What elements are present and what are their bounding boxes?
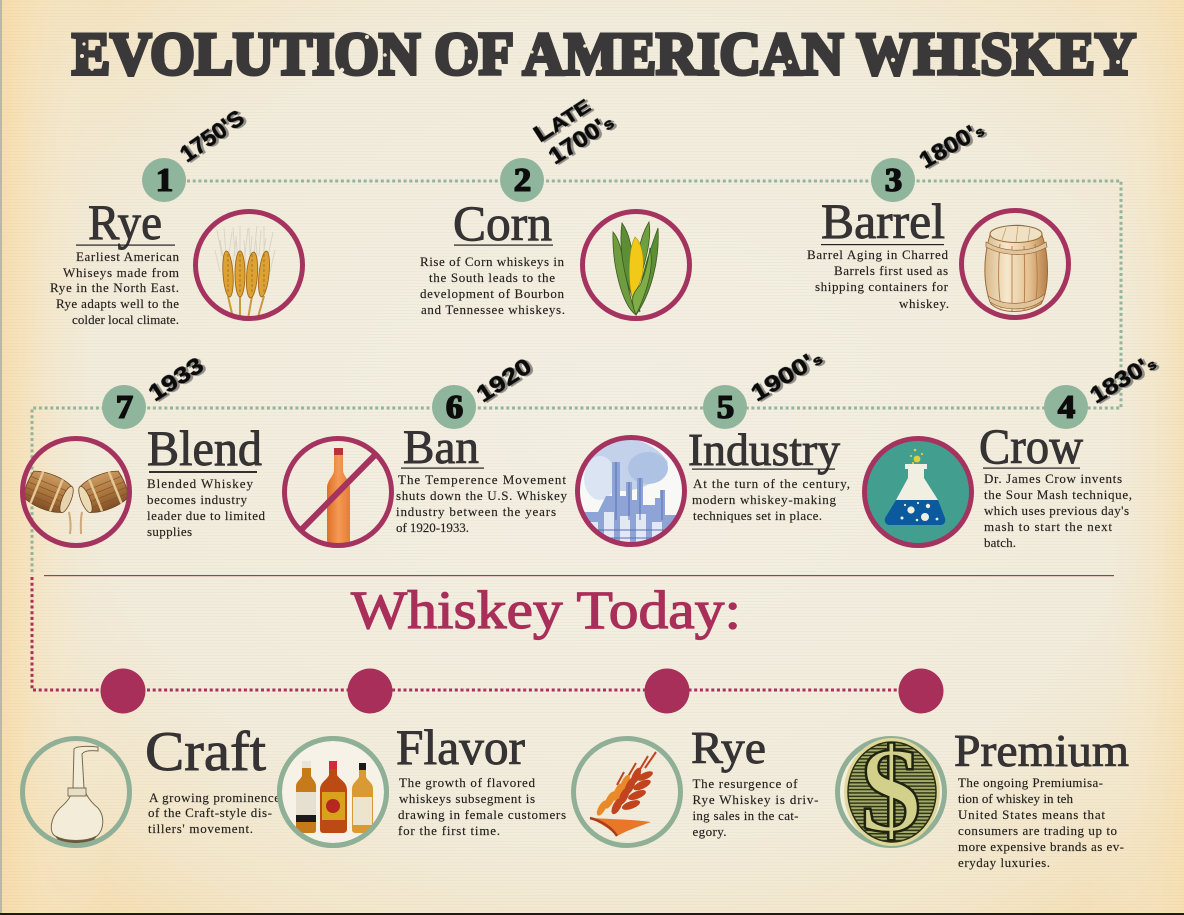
icon: banned bottle <box>284 438 392 546</box>
body text rye: Rye adapts well to the <box>56 296 179 311</box>
body text blend <box>147 476 266 539</box>
date late 1700's: LATE <box>529 92 595 147</box>
body text rye today: The resurgence of <box>692 776 798 791</box>
divider rule <box>44 575 1114 576</box>
body text corn: development of Bourbon <box>420 286 564 301</box>
body text premium: more expensive brands as ev- <box>958 839 1124 854</box>
step 7 node: 7 <box>116 389 132 426</box>
panel: rye today <box>574 722 818 846</box>
panel: step 6 ban <box>284 353 568 546</box>
date 1800's: 1800's <box>914 116 988 173</box>
body text premium: The ongoing Premiumisa- <box>958 775 1103 790</box>
body text barrel: Barrels first used as <box>834 263 948 278</box>
body text corn: the South leads to the <box>429 270 555 285</box>
step 2 node: 2 <box>514 162 530 199</box>
body text industry: modern whiskey-making <box>692 492 836 507</box>
heading: whiskey today: Whiskey Today: <box>351 580 741 640</box>
body text crow: batch. <box>984 535 1016 550</box>
step 4 node <box>1044 385 1088 429</box>
icon: barrel <box>962 210 1068 318</box>
body text flavor: The growth of flavored <box>399 775 536 790</box>
panel: flavor <box>280 719 566 846</box>
body text craft <box>148 790 280 836</box>
icon: factory <box>576 437 690 548</box>
heading rye: Rye <box>88 194 162 250</box>
icon: copper still <box>22 738 130 846</box>
body text corn: Rise of Corn whiskeys in <box>420 254 564 269</box>
panel: step 2 corn <box>420 92 690 318</box>
date 1920: 1920 <box>472 353 536 407</box>
panel: step 1 rye <box>50 105 302 327</box>
step 5 node <box>703 385 747 429</box>
body text rye today: Rye Whiskey is driv- <box>692 792 818 807</box>
body text corn <box>420 254 565 317</box>
body text rye: Rye in the North East. <box>50 280 179 295</box>
heading blend: Blend <box>147 420 262 476</box>
panel: premium <box>838 723 1129 870</box>
body text crow <box>984 471 1132 550</box>
step 7 node <box>102 385 146 429</box>
body text ban: The Temperence Movement <box>398 472 566 487</box>
body text blend: becomes industry <box>147 492 248 507</box>
heading flavor: Flavor <box>396 719 525 775</box>
title: EVOLUTION OF AMERICAN WHISKEY <box>72 21 1136 87</box>
heading premium: Premium <box>954 725 1129 776</box>
icon: wheat <box>196 212 302 319</box>
step 3 node <box>871 158 915 202</box>
icon: pouring barrels <box>20 438 132 546</box>
body text crow: Dr. James Crow invents <box>984 471 1122 486</box>
body text barrel: whiskey. <box>899 296 949 311</box>
body text rye today <box>692 776 818 839</box>
panel: step 3 barrel <box>807 116 1068 318</box>
date 1750's: 1750'S <box>175 105 249 167</box>
body text premium <box>958 775 1124 870</box>
step 3 node: 3 <box>884 162 902 199</box>
heading ban: Ban <box>403 421 479 474</box>
date 1830's: 1830's <box>1085 349 1160 408</box>
icon: whiskey bottles <box>280 738 386 846</box>
body text premium: consumers are trading up to <box>958 823 1117 838</box>
step 4 node: 4 <box>1058 389 1074 426</box>
body text craft: tillers' movement. <box>148 821 253 836</box>
heading barrel: Barrel <box>821 193 945 249</box>
body text corn: and Tennessee whiskeys. <box>421 302 565 317</box>
body text rye: Earliest American <box>76 249 180 264</box>
panel: step 5 industry <box>576 344 850 548</box>
step 5 node: 5 <box>716 389 734 426</box>
step 2 node <box>500 158 544 202</box>
body text rye: colder local climate. <box>72 312 179 327</box>
heading crow: Crow <box>979 418 1083 474</box>
body text barrel: shipping containers for <box>815 279 949 294</box>
body text flavor: for the first time. <box>398 823 500 838</box>
body text blend: Blended Whiskey <box>147 476 254 491</box>
body text crow: which uses previous day's <box>984 503 1129 518</box>
body text ban: shuts down the U.S. Whiskey <box>396 488 568 503</box>
icon: rye logo <box>574 738 680 846</box>
step 1 node <box>142 158 186 202</box>
body text ban: of 1920-1933. <box>396 520 469 535</box>
icon: dollar coin: $ <box>860 723 922 858</box>
body text barrel: Barrel Aging in Charred <box>807 247 948 262</box>
body text industry: techniques set in place. <box>693 508 822 523</box>
body text industry <box>692 476 850 523</box>
date late 1700's <box>529 92 618 169</box>
body text crow: mash to start the next <box>984 519 1112 534</box>
body text ban: industry between the years <box>396 504 556 519</box>
icon: dollar coin <box>835 736 947 848</box>
body text craft: A growing prominence <box>149 790 280 805</box>
icon: flask <box>864 438 972 546</box>
body text rye today: egory. <box>692 824 726 839</box>
panel: step 7 blend <box>20 352 266 546</box>
step 1 node: 1 <box>156 162 172 199</box>
date late 1700's: 1700's <box>544 108 618 169</box>
body text rye: Whiseys made from <box>63 265 179 280</box>
date 1900's: 1900's <box>746 344 827 406</box>
heading craft: Craft <box>145 721 266 783</box>
icon: corn <box>582 212 690 318</box>
body text barrel <box>807 247 949 311</box>
body text premium: eryday luxuries. <box>958 855 1050 870</box>
panel: craft <box>22 721 280 846</box>
body text premium: tion of whiskey in teh <box>958 791 1074 806</box>
step 6 node <box>432 385 476 429</box>
body text rye <box>50 249 180 327</box>
body text flavor: drawing in female customers <box>398 807 566 822</box>
body text rye today: ing sales in the cat- <box>692 808 798 823</box>
today timeline nodes <box>100 668 944 714</box>
body text blend: supplies <box>147 524 192 539</box>
body text flavor: whiskeys subsegment is <box>399 791 535 806</box>
date 1933: 1933 <box>144 352 208 406</box>
body text flavor <box>398 775 566 838</box>
panel: step 4 crow <box>864 349 1160 550</box>
body text premium: United States means that <box>958 807 1105 822</box>
body text industry: At the turn of the century, <box>693 476 850 491</box>
heading corn: Corn <box>453 195 552 251</box>
step 6 node: 6 <box>446 389 462 426</box>
body text ban <box>396 472 568 535</box>
body text craft: of the Craft-style dis- <box>148 805 272 820</box>
body text crow: the Sour Mash technique, <box>984 487 1132 502</box>
body text blend: leader due to limited <box>147 508 266 523</box>
dotted timeline path <box>32 181 1121 690</box>
heading rye today: Rye <box>691 722 766 773</box>
heading industry: Industry <box>688 424 840 475</box>
